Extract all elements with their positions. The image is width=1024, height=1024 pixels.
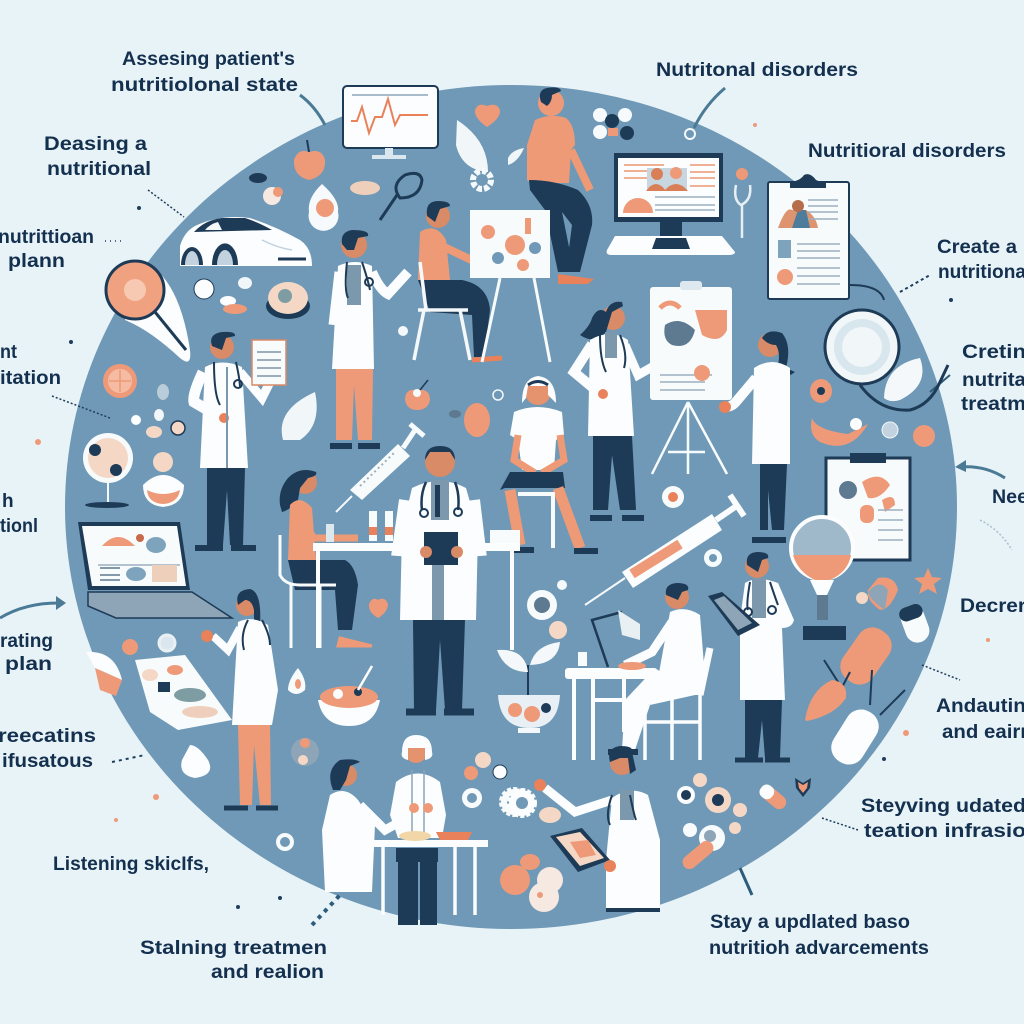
label: listening skills: Listening skicIfs, bbox=[53, 854, 209, 875]
stethoscope and leaf right bbox=[825, 285, 948, 410]
icon: plant in glass bowl bbox=[497, 642, 560, 733]
icon: food right cluster bbox=[810, 379, 935, 447]
label: nutrition plan bbox=[0, 227, 94, 272]
label: explaining treatment and realtion bbox=[140, 938, 327, 983]
label: stay updated: Stay a updlated baso bbox=[710, 912, 910, 933]
label: designing a nutritional bbox=[44, 134, 151, 180]
label: and eating bbox=[936, 696, 1024, 743]
icon: apple under table bbox=[369, 599, 388, 618]
computer monitor with video call bbox=[607, 153, 735, 255]
laptop with meal content bbox=[78, 522, 232, 618]
icon: magnifying lamp bbox=[791, 517, 853, 640]
icon: heart monitor bbox=[343, 86, 438, 159]
icon: orange food small middle bbox=[405, 380, 503, 437]
label: precautions bbox=[0, 726, 96, 772]
label: creating nutrition treatment: treatm bbox=[961, 394, 1024, 415]
icon: food poster left bbox=[135, 655, 232, 730]
icon: stethoscope small bbox=[380, 173, 422, 220]
label: and eating: Andautin bbox=[936, 696, 1024, 717]
icon: apple bbox=[294, 140, 325, 180]
label: explaining treatment and realtion: and realion bbox=[211, 962, 324, 983]
label: patient education: nt bbox=[0, 342, 18, 363]
icon: peach top bbox=[475, 105, 500, 127]
label: health promotion bbox=[0, 491, 38, 537]
central blue circle bbox=[65, 85, 957, 929]
person: woman in white coat bottom bbox=[322, 759, 412, 892]
person: doctor with tablet bottom bbox=[534, 746, 660, 912]
label: assessing patient's nutritional state bbox=[111, 49, 298, 96]
background small navy dots bbox=[69, 206, 953, 909]
clipboard with profile bbox=[768, 174, 849, 299]
icon: citrus slice left bbox=[103, 364, 185, 438]
icon: pear small bbox=[288, 668, 305, 694]
label: stay updated bbox=[709, 912, 929, 959]
person: seated patient in orange top bbox=[414, 201, 502, 360]
label: designing a nutritional: nutritional bbox=[47, 159, 151, 180]
label: creating nutrition treatment bbox=[961, 342, 1024, 415]
person: doctor with clipboard bbox=[194, 332, 286, 548]
label: precautions: ifusatous bbox=[2, 751, 93, 772]
person: central doctor with tablet bbox=[398, 446, 480, 712]
right arrowhead bbox=[955, 460, 966, 472]
syringe upper bbox=[336, 424, 424, 512]
label: creating plan: rating bbox=[0, 631, 53, 652]
label: patient education bbox=[0, 342, 61, 389]
icon: molecule cluster bbox=[593, 108, 634, 140]
person: woman doctor right bbox=[719, 331, 795, 540]
label: creating plan: plan bbox=[5, 654, 52, 675]
icon: gear held by doctor bbox=[509, 790, 535, 816]
easel with food chart bbox=[470, 210, 550, 362]
icon: food items row bbox=[194, 277, 310, 319]
label: designing a nutritional: Deasing a bbox=[44, 134, 147, 155]
person: woman serving bottom bbox=[390, 735, 446, 925]
person: man seated at desk bbox=[608, 583, 710, 760]
label: nutrition plan: nutrittioan bbox=[0, 227, 94, 248]
label: nutritional disorders right: Nutritioral disorders bbox=[808, 141, 1006, 162]
person: seated woman in white top bbox=[500, 376, 598, 551]
label: health promotion: h bbox=[2, 491, 14, 512]
person: doctor woman presenting food bbox=[201, 589, 278, 808]
label: assessing patient's nutritional state: nutritiolonal state bbox=[111, 75, 298, 96]
background sparkle dots bbox=[35, 123, 990, 822]
icon: cookies bottom bbox=[500, 807, 563, 912]
person: doctor woman presenting bbox=[574, 302, 677, 518]
label: health promotion: tionl bbox=[0, 516, 38, 537]
icon: star and pills bbox=[856, 568, 942, 646]
icon: pills and molecules bottom right bbox=[677, 773, 811, 872]
label: assessing patient's nutritional state: Assesing patient's bbox=[122, 49, 295, 70]
table with glasses bbox=[313, 511, 520, 650]
label: nutritional disorders top: Nutritonal disorders bbox=[656, 60, 858, 81]
label: and eating: and eairı bbox=[942, 722, 1024, 743]
icon: white leaf left bbox=[282, 392, 317, 440]
icon: small leaf top bbox=[508, 148, 524, 165]
label: patient education: itation bbox=[0, 368, 61, 389]
syringe large bbox=[585, 495, 744, 605]
icon: patient bust bbox=[143, 452, 184, 507]
label: staying updated: Steyving udated bbox=[861, 796, 1024, 817]
label: stay updated: nutritioh advarcements bbox=[709, 938, 929, 959]
label: create a nutritional: nutritiona bbox=[938, 262, 1024, 283]
person: doctor with tablet right bbox=[708, 552, 794, 760]
easel presentation board bbox=[650, 281, 732, 474]
label: create a nutritional bbox=[937, 237, 1024, 283]
icon: hand and fruit left bbox=[86, 635, 210, 778]
label: precautions: reecatins bbox=[0, 726, 96, 747]
table with food bbox=[368, 831, 488, 915]
icon: magnifying glass left bbox=[106, 258, 190, 362]
icon: globe with food bbox=[83, 433, 133, 508]
icon: small food cluster bbox=[249, 173, 380, 205]
icon: leaf top bbox=[456, 120, 488, 172]
icon: white car bbox=[180, 217, 312, 266]
person: seated man in orange top bbox=[527, 87, 594, 284]
label: staying updated: teation infrasio bbox=[864, 821, 1024, 842]
icon: gear center right bbox=[527, 486, 722, 639]
label: nutrition plan: plann bbox=[8, 251, 65, 272]
seated woman at table bbox=[280, 470, 372, 648]
label: create a nutritional: Create a bbox=[937, 237, 1017, 258]
icon: salad bowl bbox=[318, 666, 380, 726]
icon: gear top bbox=[473, 171, 491, 189]
label: staying updated bbox=[861, 796, 1024, 842]
person: doctor with orange trousers bbox=[330, 230, 408, 446]
label: creating nutrition treatment: Cretin bbox=[962, 342, 1024, 363]
clipboard right with food chart bbox=[826, 453, 910, 560]
label: decre: Decrer bbox=[960, 596, 1024, 617]
desk with lamp bbox=[565, 610, 657, 760]
label: creating nutrition treatment: nutrita bbox=[962, 370, 1024, 391]
left arrowhead bbox=[56, 596, 66, 610]
label: explaining treatment and realtion: Stalning treatmen bbox=[140, 938, 327, 959]
icon: food molecules bottom bbox=[276, 738, 527, 851]
icon: carrots bbox=[805, 621, 905, 771]
icon: pear bbox=[309, 184, 338, 231]
icon: stethoscope hanging bbox=[735, 168, 750, 238]
label: creating plan bbox=[0, 631, 53, 675]
